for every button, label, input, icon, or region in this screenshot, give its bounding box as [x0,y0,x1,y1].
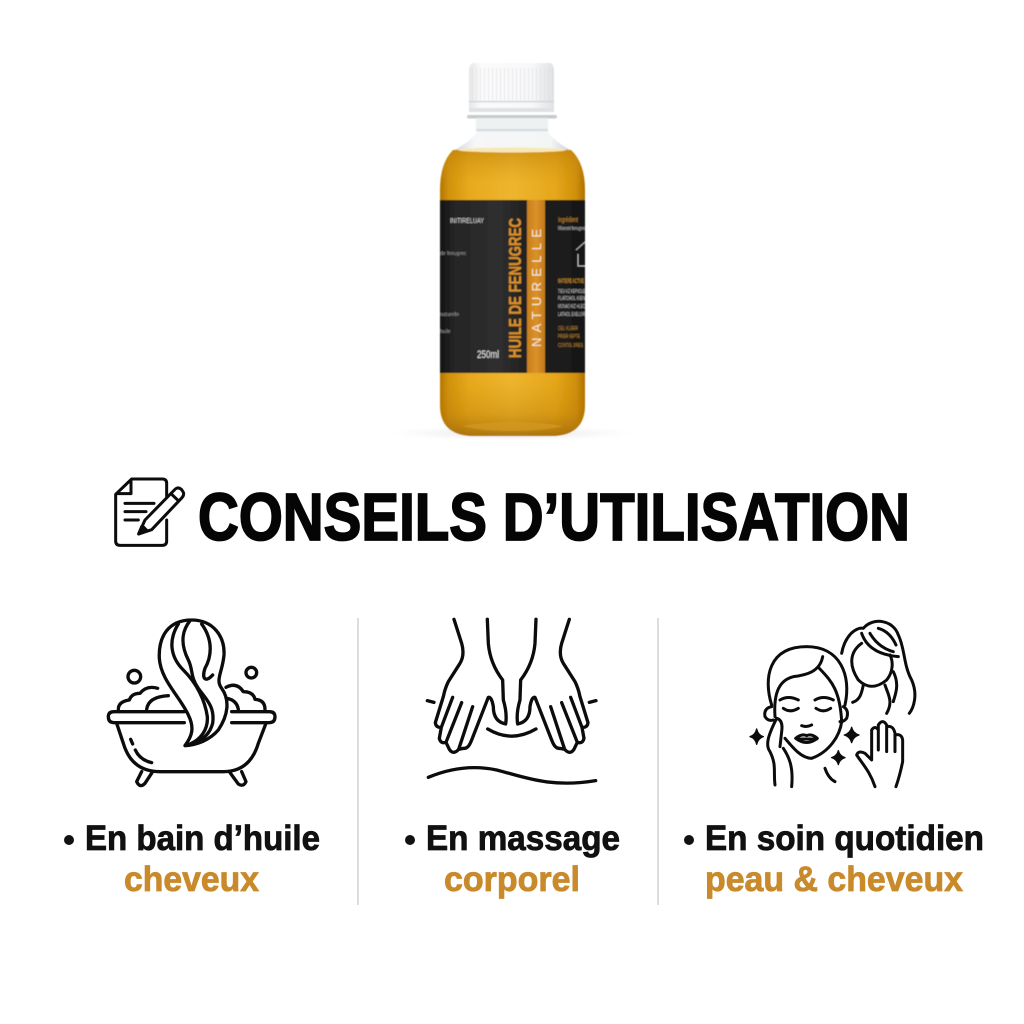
icon: massaging hands [427,619,596,783]
bottle naturelle: NATURELLE [529,229,544,347]
icon: document and pencil [116,479,184,545]
label: en massage: En massage [426,819,620,858]
bottle label [440,200,586,373]
panel: massage [405,619,620,899]
bottle right column text [558,217,586,349]
label: en bain d'huile: En bain d’huile [85,819,320,858]
bottle volume: 250ml [477,349,499,361]
icon: bath with hair [108,620,275,786]
panel: bain d'huile [64,620,320,899]
label: en soin quotidien: peau & cheveux [705,860,964,899]
icon: faces and hand [750,621,915,787]
product bottle [437,62,587,438]
bottle right column text: LATHOL EXELOR [558,312,585,318]
bottle right column text: CEL KLEER [558,326,578,332]
label: en soin quotidien: En soin quotidien [705,819,984,858]
dividers [358,618,658,905]
title block [116,479,910,555]
label: en massage [405,819,620,899]
bottle right column text: MATIERE ACTIVE [558,278,584,285]
bottle right column text: PRIER KEPTE [558,334,580,340]
bottle left edge text: naturelle [440,312,459,318]
panel: soin quotidien [684,621,984,899]
bottle right column text: MONAO KIZ HLEC [558,304,585,310]
bottle right column text: Ingrédient [558,217,578,224]
bottle label small top text: INITIRELUAY [450,216,484,225]
bottle product name: HUILE DE FENUGREC [505,218,525,358]
heading: CONSEILS D’UTILISATION [198,480,910,555]
bottle right column text: FLATCHOL KIEN [558,296,585,302]
bottle left edge text: de fenugrec [440,251,467,257]
bottle left edge text: huile [440,329,451,335]
label: en massage: corporel [444,860,580,899]
bottle left edge text [440,251,467,335]
label: en soin quotidien [684,819,984,899]
bottle right column text: CONTIS JIRES [558,343,583,349]
label: en bain d'huile [64,819,320,899]
bottle right column text: Mixeont fenugrec [558,226,586,232]
label: en bain d'huile: cheveux [124,860,260,899]
bottle right column text: TIES KIZ KEPNOLE [558,289,585,295]
